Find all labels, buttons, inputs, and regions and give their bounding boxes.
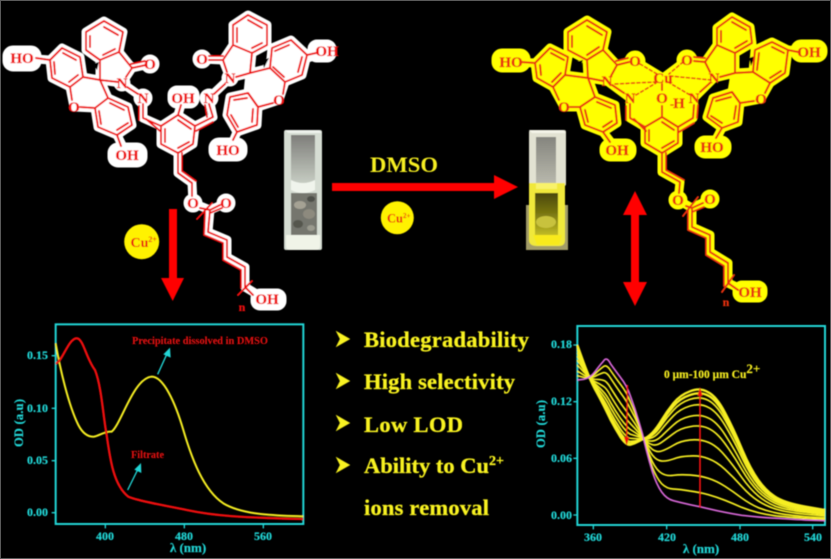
y axis tick labels: 0.00 <box>27 505 48 519</box>
molecule: Cu2+ complex (red on yellow): N <box>602 74 613 90</box>
curve label: filtrate: Filtrate <box>131 450 164 461</box>
y axis tick labels: 0.06 <box>551 451 572 465</box>
badge: Cu2+ on downward arrow: 2+ <box>148 235 157 244</box>
molecule: free polymer sensor (red on white): n <box>239 300 246 314</box>
molecule: free polymer sensor (red on white): O <box>187 196 199 212</box>
molecule: Cu2+ complex (red on yellow): OH <box>738 285 762 301</box>
badge: Cu2+ on downward arrow <box>124 224 159 259</box>
y axis tick labels <box>551 337 572 522</box>
molecule: Cu2+ complex (red on yellow): OH <box>605 143 629 159</box>
molecule: free polymer sensor (red on white): O <box>273 93 285 109</box>
badge: Cu2+ on reaction arrow: 2+ <box>403 212 410 220</box>
y axis tick labels: 0.18 <box>551 337 572 351</box>
molecule: Cu2+ complex (red on yellow): N <box>625 91 636 107</box>
curve label: concentration range: 2+ <box>746 361 760 376</box>
y axis tick labels: 0.12 <box>551 394 572 408</box>
molecule: free polymer sensor (red on white): N <box>204 91 215 107</box>
x axis tick labels: 400 <box>96 529 114 543</box>
y axis tick labels: 0.10 <box>27 401 48 415</box>
molecule: Cu2+ complex (red on yellow): O <box>755 92 767 108</box>
molecule: free polymer sensor (red on white): OH <box>115 148 139 164</box>
molecule: free polymer sensor (red on white): O <box>68 100 80 116</box>
molecule: free polymer sensor (red on white): N <box>138 91 149 107</box>
x axis tick labels: 560 <box>254 529 272 543</box>
axis title: OD: OD (a.u) <box>12 399 26 447</box>
photo: cuvette with precipitate <box>284 130 322 250</box>
photo: cuvette with yellow solution <box>526 130 568 250</box>
arrow: reversible vertical <box>623 191 647 306</box>
molecule: free polymer sensor (red on white): O <box>220 196 232 212</box>
chart: titration spectra <box>534 326 825 556</box>
molecule: Cu2+ complex (red on yellow): O <box>672 193 684 209</box>
badge: Cu2+ on reaction arrow <box>381 201 414 234</box>
x axis tick labels <box>584 530 822 544</box>
item: LOD: Low LOD <box>364 412 463 437</box>
x axis tick labels <box>96 529 272 543</box>
molecule: free polymer sensor (red on white) <box>7 15 339 314</box>
molecule: free polymer sensor (red on white): OH <box>171 91 195 107</box>
molecule: Cu2+ complex (red on yellow): n <box>723 295 730 309</box>
molecule: Cu2+ complex (red on yellow): OH <box>797 45 821 61</box>
molecule: Cu2+ complex (red on yellow): O <box>704 192 716 208</box>
item: ions removal: ions removal <box>364 495 489 520</box>
arrow: downward precipitate <box>161 209 184 301</box>
list: key features <box>336 327 530 520</box>
y axis tick labels: 0.05 <box>27 453 48 467</box>
y axis tick labels: 0.00 <box>551 508 572 522</box>
x axis tick labels: 480 <box>731 530 749 544</box>
molecule: Cu2+ complex (red on yellow): HO <box>700 140 724 156</box>
molecule: free polymer sensor (red on white): O <box>144 57 156 73</box>
molecule: Cu2+ complex (red on yellow): N <box>689 91 700 107</box>
item: Cu removal: Ability to Cu <box>364 453 489 478</box>
badge: Cu2+ on downward arrow: Cu <box>130 236 148 251</box>
badge: Cu2+ on reaction arrow: Cu <box>387 212 403 226</box>
molecule: free polymer sensor (red on white): HO <box>216 143 240 159</box>
item: selectivity: High selectivity <box>364 369 516 394</box>
molecule: Cu2+ complex (red on yellow): O <box>656 91 668 107</box>
molecule: free polymer sensor (red on white): O <box>196 52 208 68</box>
molecule: free polymer sensor (red on white): OH <box>255 292 279 308</box>
label: DMSO: DMSO <box>370 152 438 177</box>
bullet arrows <box>336 331 350 473</box>
x axis tick labels: 480 <box>175 529 193 543</box>
molecule: Cu2+ complex (red on yellow) <box>496 17 823 309</box>
y axis tick labels <box>27 348 48 519</box>
curve label: precipitate: Precipitate dissolved in DMSO <box>132 336 268 347</box>
item: Cu removal: 2+ <box>489 454 504 469</box>
molecule: free polymer sensor (red on white): OH <box>315 44 339 60</box>
molecule: Cu2+ complex (red on yellow): N <box>709 71 720 87</box>
axis title: wavelength: λ (nm) <box>683 541 719 556</box>
axis title: OD: OD (a.u) <box>534 400 548 448</box>
x axis tick labels: 540 <box>804 530 822 544</box>
molecule: Cu2+ complex (red on yellow): HO <box>499 55 523 71</box>
molecule: Cu2+ complex (red on yellow): O <box>629 54 641 70</box>
y axis tick labels: 0.15 <box>27 348 48 362</box>
molecule: Cu2+ complex (red on yellow): O <box>558 100 570 116</box>
x axis tick labels: 420 <box>658 530 676 544</box>
molecule: free polymer sensor (red on white): HO <box>10 51 34 67</box>
molecule: Cu2+ complex (red on yellow): - <box>670 97 674 111</box>
x axis tick labels: 360 <box>584 530 602 544</box>
item: biodegradability: Biodegradability <box>364 327 530 352</box>
molecule: Cu2+ complex (red on yellow): O <box>681 53 693 69</box>
axis title: wavelength: λ (nm) <box>170 540 206 555</box>
chart: precipitate vs filtrate spectra <box>12 324 303 555</box>
molecule: free polymer sensor (red on white): N <box>225 71 236 87</box>
molecule: Cu2+ complex (red on yellow): Cu <box>653 71 673 87</box>
molecule: Cu2+ complex (red on yellow): H <box>673 96 685 112</box>
molecule: free polymer sensor (red on white): N <box>117 76 128 92</box>
curve label: concentration range: 0 μm-100 μm Cu <box>664 369 746 381</box>
arrow: DMSO reaction <box>332 175 518 199</box>
